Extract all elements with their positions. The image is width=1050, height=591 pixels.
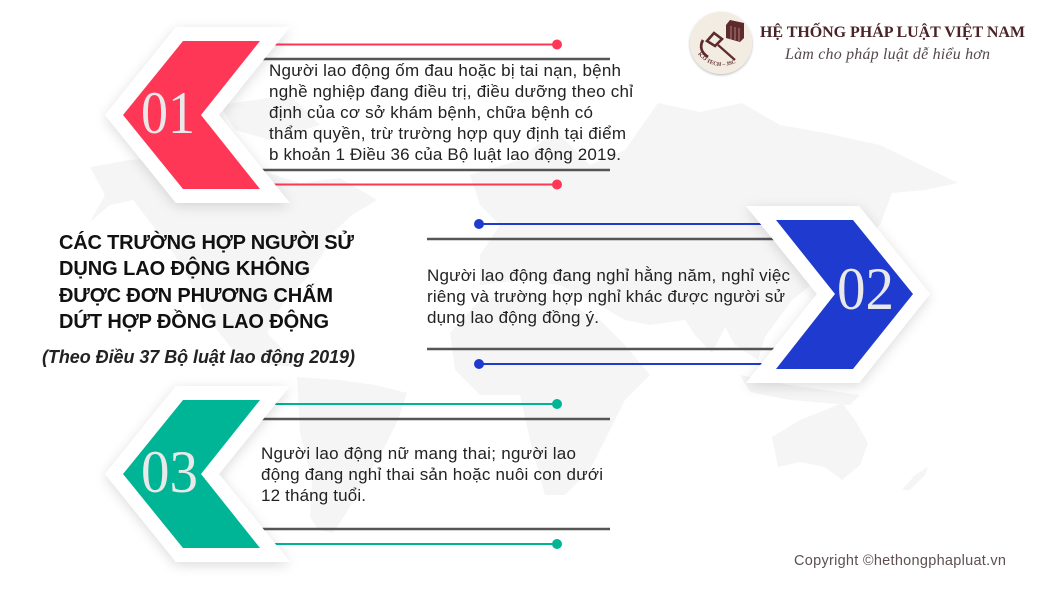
map: New Zealand xyxy=(902,467,928,490)
text 02: riêng và trường hợp nghỉ khác được người sử xyxy=(427,287,785,306)
copyright: Copyright ©hethongphapluat.vn xyxy=(794,553,1006,569)
brand tagline: Làm cho pháp luật dễ hiểu hơn xyxy=(784,46,990,63)
map: Eurasia xyxy=(470,103,958,360)
text 02: Người lao động đang nghỉ hằng năm, nghỉ việc xyxy=(427,266,790,285)
text 03: động đang nghỉ thai sản hoặc nuôi con dưới xyxy=(261,465,603,484)
chevron 01 xyxy=(105,27,290,203)
map: South-East Asian islands xyxy=(740,375,860,405)
subtitle: (Theo Điều 37 Bộ luật lao động 2019) xyxy=(42,347,355,367)
title: DỨT HỢP ĐỒNG LAO ĐỘNG xyxy=(59,309,329,333)
text 02: dụng lao động đồng ý. xyxy=(427,308,599,327)
title: DỤNG LAO ĐỘNG KHÔNG xyxy=(59,256,310,280)
item 02 xyxy=(427,206,930,383)
text 01 xyxy=(269,61,633,164)
icon: gavel xyxy=(701,33,735,60)
item 03 xyxy=(105,386,610,562)
text 03 xyxy=(261,444,603,505)
map: Africa xyxy=(450,290,650,495)
connector lines 02 xyxy=(427,219,775,369)
title: CÁC TRƯỜNG HỢP NGƯỜI SỬ xyxy=(59,230,354,254)
title: ĐƯỢC ĐƠN PHƯƠNG CHẤM xyxy=(59,284,333,307)
title xyxy=(59,230,354,333)
icon: books xyxy=(726,20,744,42)
chevron 03: 03 xyxy=(141,439,198,505)
brand name: HỆ THỐNG PHÁP LUẬT VIỆT NAM xyxy=(760,21,1025,41)
text 02 xyxy=(427,266,790,327)
map: South America xyxy=(297,377,407,533)
text 01: định của cơ sở khám bệnh, chữa bệnh có xyxy=(269,103,593,122)
logo seal text: K.O TECH – JSC xyxy=(698,52,736,66)
connector lines 01 xyxy=(260,40,610,190)
connector lines 03 xyxy=(260,399,610,549)
background world map xyxy=(90,95,958,533)
chevron 03 xyxy=(105,386,290,562)
text 01: Người lao động ốm đau hoặc bị tai nạn, bệnh xyxy=(269,61,621,80)
text 03: 12 tháng tuổi. xyxy=(261,486,366,505)
map: North America xyxy=(90,150,377,367)
item 01 xyxy=(105,27,633,203)
text 01: b khoản 1 Điều 36 của Bộ luật lao động 2019. xyxy=(269,145,621,164)
map: Australia xyxy=(772,403,868,480)
map: Arctic islands xyxy=(220,95,320,140)
chevron 02: 02 xyxy=(837,256,894,322)
chevron 02 xyxy=(746,206,930,383)
text 01: thẩm quyền, trừ trường hợp quy định tại điểm xyxy=(269,124,626,143)
text 03: Người lao động nữ mang thai; người lao xyxy=(261,444,576,463)
logo xyxy=(688,12,754,76)
chevron 01: 01 xyxy=(141,80,195,146)
text 01: nghề nghiệp đang điều trị, điều dưỡng theo chỉ xyxy=(269,82,633,101)
